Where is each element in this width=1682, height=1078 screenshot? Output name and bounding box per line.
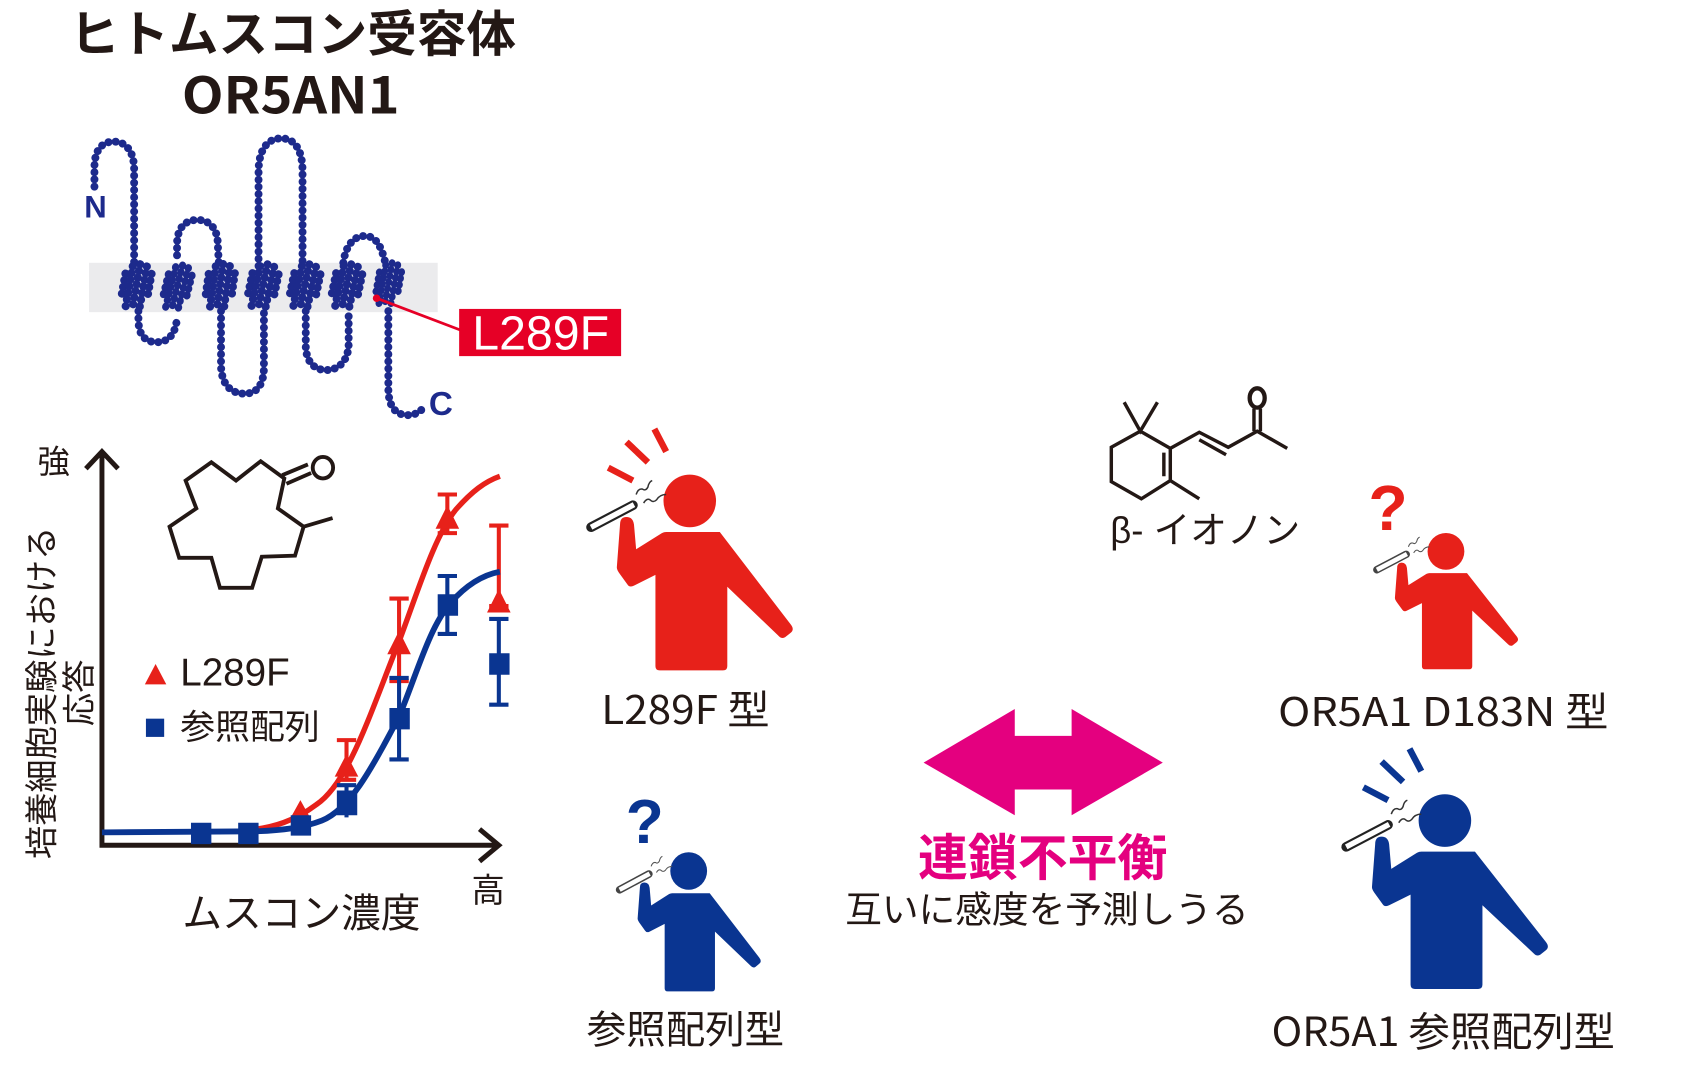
terminus label N: N [84, 190, 107, 225]
protein backbone [94, 138, 423, 415]
molecule: beta-ionone [1111, 388, 1287, 499]
label: D183N type: OR5A1 D183N 型 [1278, 681, 1608, 738]
caption: 互いに感度を予測しうる [845, 879, 1249, 933]
panel: receptor membrane topology [84, 138, 621, 423]
axes [86, 452, 499, 861]
title [70, 0, 516, 129]
label: L289F type: L289F 型 [601, 679, 770, 736]
legend: reference: 参照配列 [180, 700, 320, 750]
title: OR5AN1 [182, 56, 400, 129]
mutation badge L289F: L289F [472, 307, 609, 361]
heading: linkage disequilibrium: 連鎖不平衡 [918, 818, 1167, 890]
x axis high label: 高 [471, 863, 505, 912]
pointer line to mutation [373, 294, 461, 330]
question mark blue: ? [626, 788, 664, 857]
y axis high label: 強 [38, 437, 70, 483]
question mark red: ? [1368, 472, 1408, 544]
icon: person OR5A1 reference strong smell [1346, 749, 1548, 989]
transmembrane helices [119, 261, 403, 314]
icon: person OR5A1 D183N question [1377, 533, 1518, 669]
x axis title: ムスコン濃度 [182, 882, 420, 939]
label: beta-ionone: β- イオノン [1110, 510, 1300, 551]
y axis title [15, 527, 101, 859]
muscone molecule [170, 457, 333, 588]
icon: person L289F strong smell [591, 429, 793, 670]
membrane band [89, 263, 438, 312]
label: reference type: 参照配列型 [587, 999, 784, 1056]
panel: dose-response chart [15, 437, 511, 939]
double arrow: linkage disequilibrium [924, 709, 1163, 815]
terminus label C: C [429, 386, 453, 423]
label: OR5A1 reference type: OR5A1 参照配列型 [1272, 999, 1615, 1058]
y axis title: 培養細胞実験における [15, 527, 64, 859]
series: reference blue [102, 572, 510, 844]
icon: person reference question [620, 852, 761, 991]
y axis title: 応答 [52, 660, 101, 726]
series: L289F red [247, 476, 511, 830]
legend: L289F: L289F [180, 651, 290, 694]
